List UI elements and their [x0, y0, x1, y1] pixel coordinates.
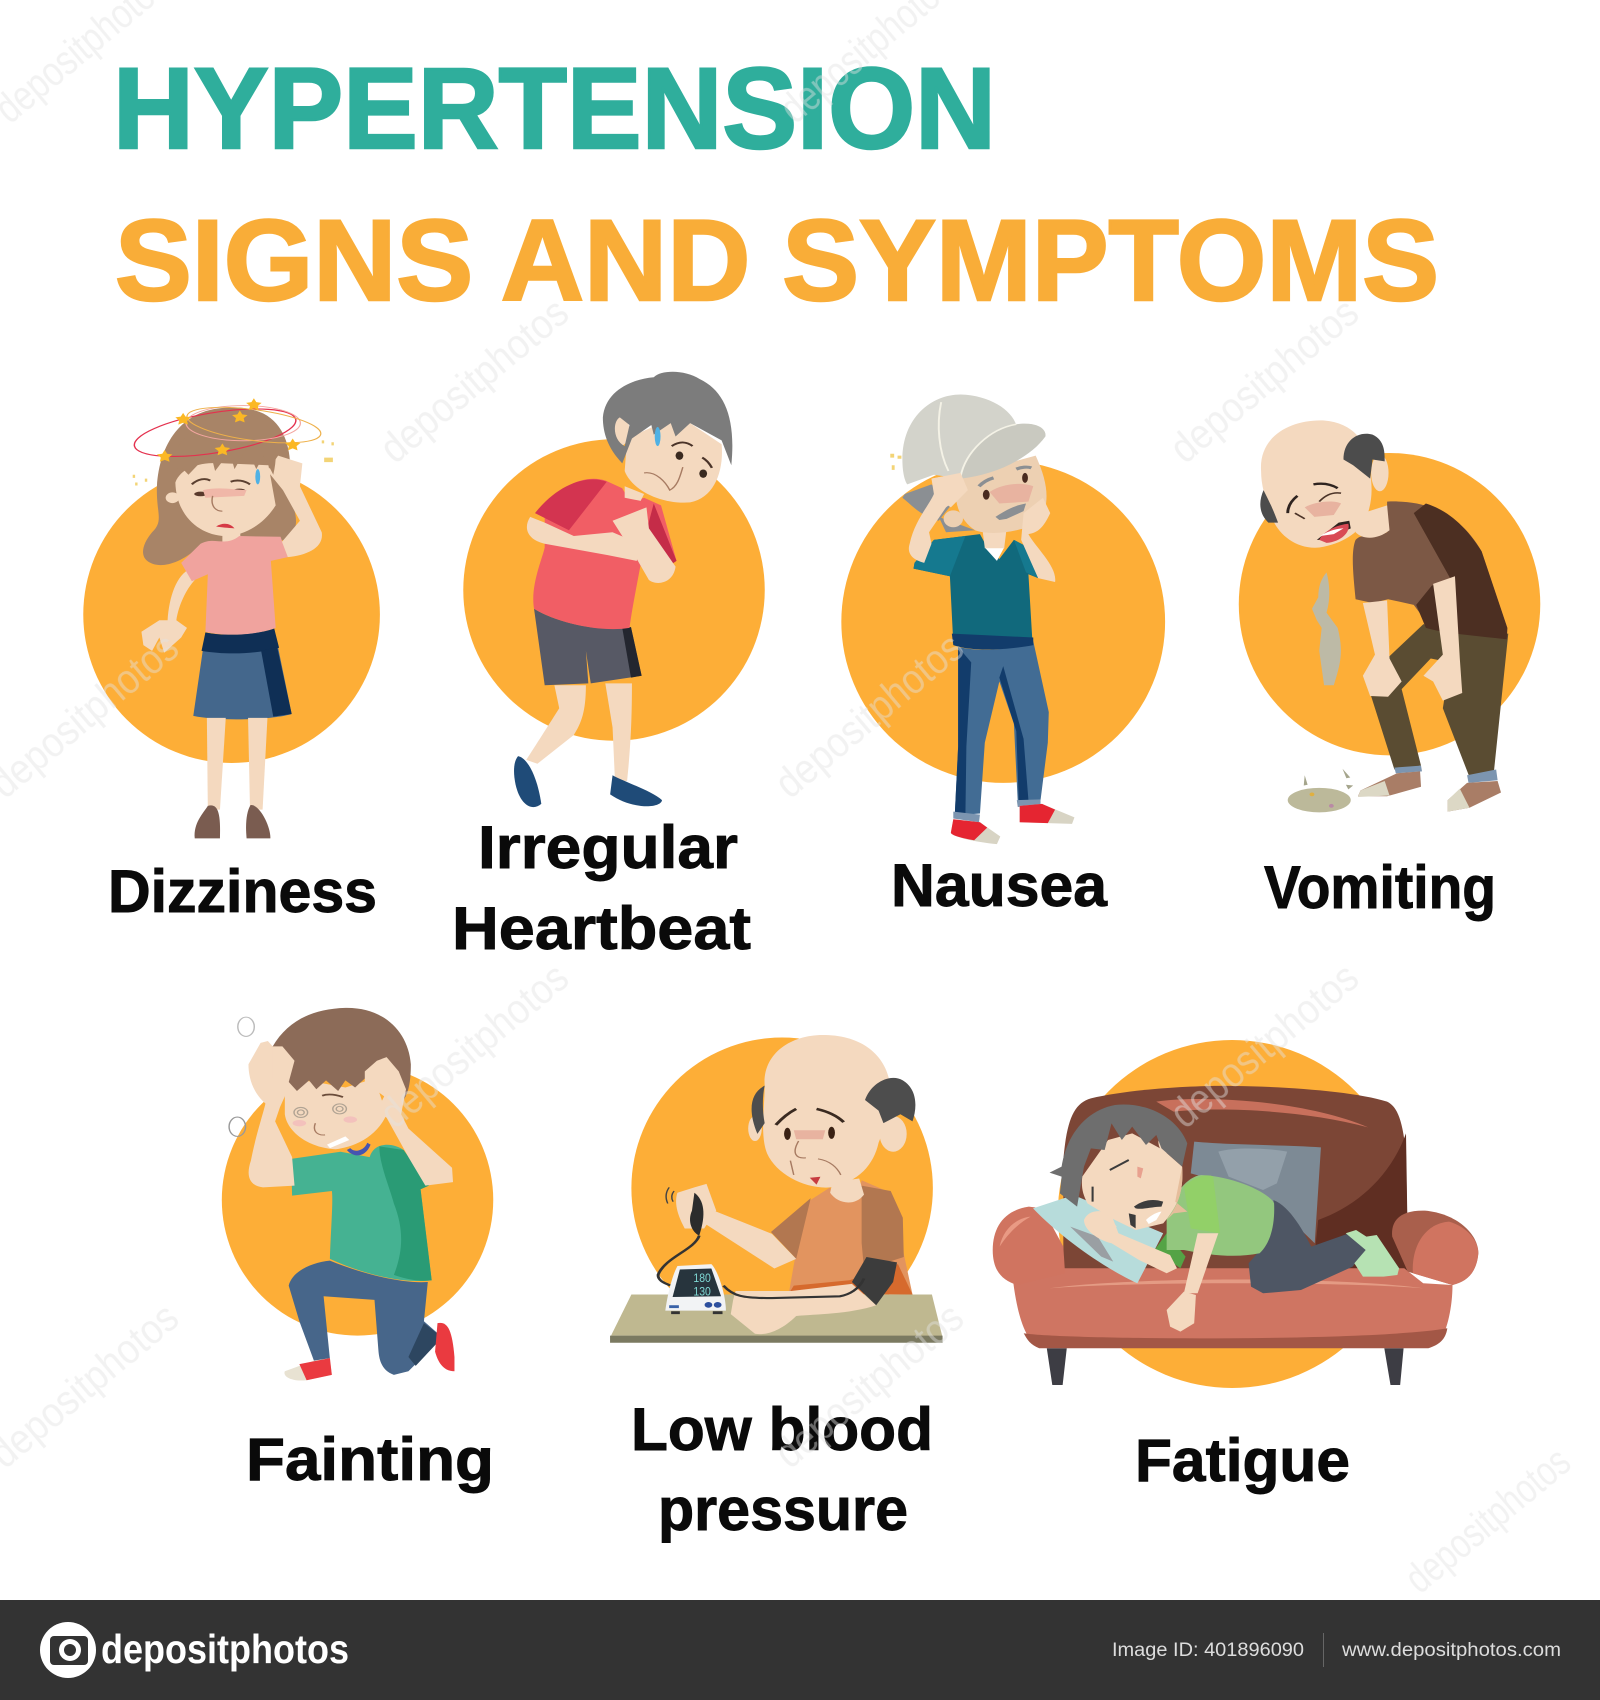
title: hypertension: HYPERTENSION: [113, 45, 996, 173]
label: low blood pressure: Low blood: [631, 1396, 933, 1463]
panel: vomiting: [1239, 420, 1540, 921]
title: signs and symptoms: SIGNS AND SYMPTOMS: [115, 197, 1439, 325]
orange circle: low blood pressure: [631, 1037, 933, 1339]
figure: bald man vomiting: [1260, 420, 1508, 812]
orange circle: nausea: [841, 461, 1165, 783]
figure: man measuring blood pressure at desk: 130: [693, 1286, 711, 1299]
label: fainting: Fainting: [246, 1426, 494, 1493]
footer bar: [0, 1600, 1600, 1700]
label: irregular heartbeat: Heartbeat: [452, 895, 751, 962]
panel: irregular heartbeat: [452, 372, 765, 962]
label: nausea: Nausea: [891, 852, 1108, 919]
figure: man in cap with nausea: [890, 394, 1074, 844]
orange circle: fainting: [222, 1064, 493, 1336]
label: dizziness: Dizziness: [108, 858, 377, 925]
figure: boy fainting on one knee: [229, 1008, 454, 1381]
watermark: repeated stock photo text: depositphotos: [1161, 953, 1367, 1137]
image id: Image ID: 401896090: [1112, 1640, 1304, 1661]
label: irregular heartbeat: [452, 814, 751, 962]
label: irregular heartbeat: Irregular: [478, 814, 738, 881]
orange circle: dizziness: [83, 466, 380, 763]
watermark: repeated stock photo text: depositphotos: [1161, 288, 1367, 472]
watermark: repeated stock photo text: depositphotos: [766, 1293, 972, 1477]
orange circle: irregular heartbeat: [463, 439, 765, 741]
watermark: repeated stock photo text: depositphotos: [766, 623, 972, 807]
figure: tired man lying on sofa: [993, 1086, 1478, 1385]
watermark: repeated stock photo text: depositphotos: [371, 953, 577, 1137]
orange circle: vomiting: [1239, 453, 1540, 755]
panel: nausea: [841, 394, 1165, 919]
panel: fatigue: [993, 1040, 1478, 1494]
panel: low blood pressure: [610, 1035, 943, 1543]
label: fatigue: Fatigue: [1135, 1427, 1350, 1494]
figure: dizzy girl: [129, 398, 334, 838]
figure: man clutching chest: [514, 372, 732, 807]
panel: dizziness: [83, 398, 380, 925]
label: low blood pressure: pressure: [658, 1476, 908, 1543]
figure: man measuring blood pressure at desk: 180: [693, 1272, 711, 1285]
icon: camera logo: [40, 1622, 96, 1678]
label: low blood pressure: [631, 1396, 933, 1543]
logo text: depositphotos: [101, 1626, 349, 1672]
label: vomiting: Vomiting: [1264, 854, 1496, 921]
panel: fainting: [222, 1008, 494, 1493]
figure: man measuring blood pressure at desk: [610, 1035, 943, 1343]
watermark: repeated stock photo text: depositphotos: [371, 288, 577, 472]
orange circle: fatigue: [1058, 1040, 1406, 1388]
website url: www.depositphotos.com: [1341, 1640, 1561, 1661]
